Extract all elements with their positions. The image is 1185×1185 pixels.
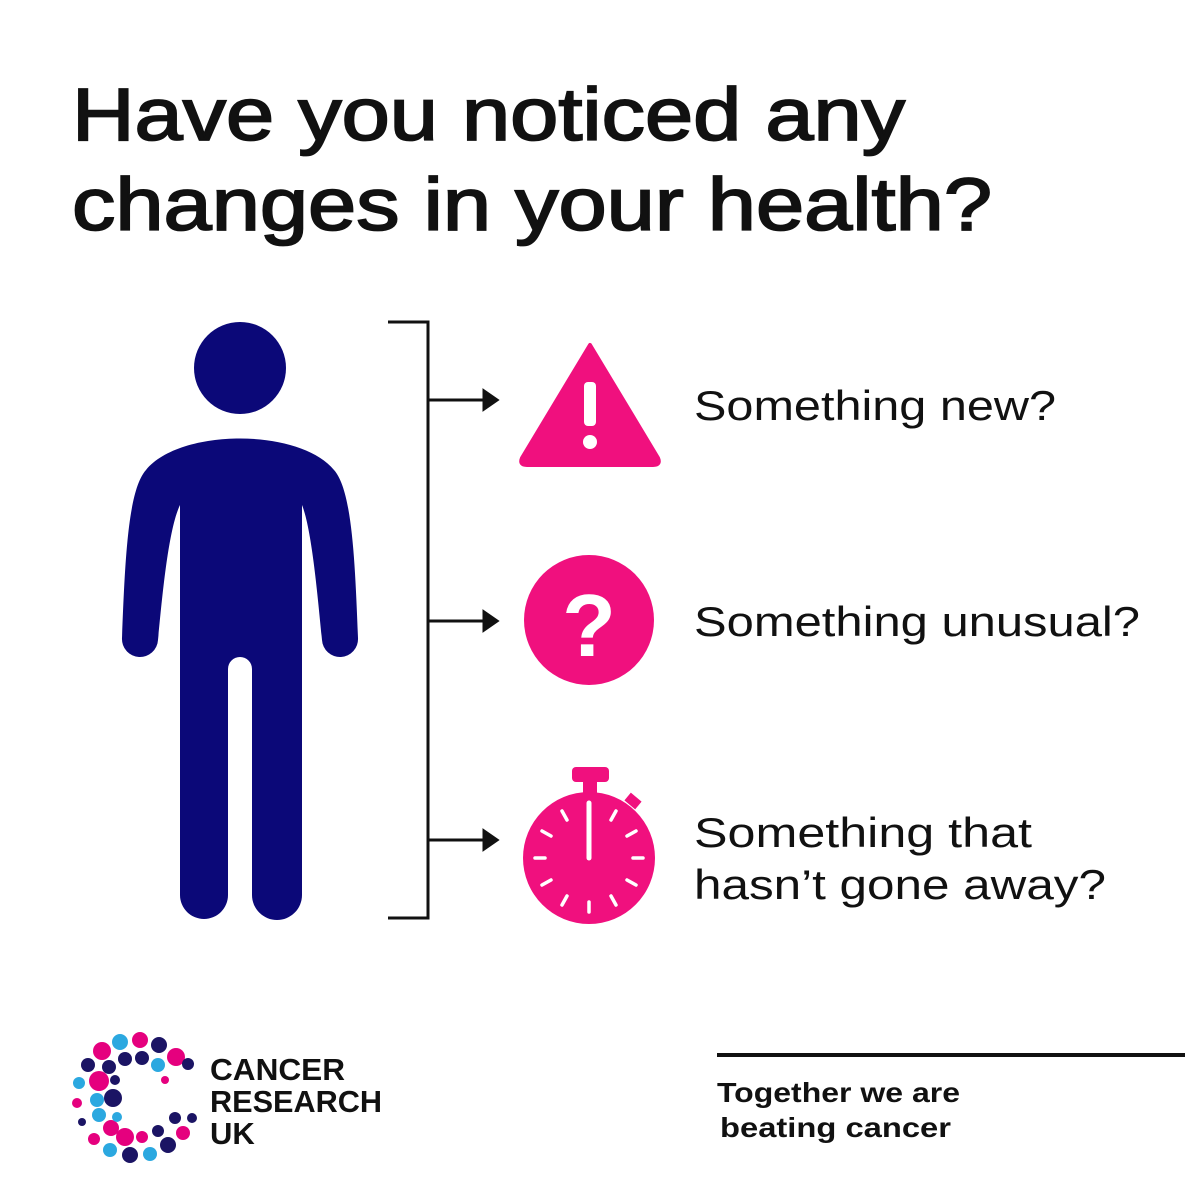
text: options: Something new? bbox=[694, 382, 1056, 429]
logo: wordmark: UK bbox=[210, 1116, 255, 1151]
icon: person figure bbox=[122, 322, 358, 920]
tagline: beating cancer bbox=[720, 1112, 951, 1143]
logo: wordmark bbox=[210, 1052, 382, 1151]
icon: question circle bbox=[524, 555, 654, 685]
logo: wordmark: CANCER bbox=[210, 1052, 345, 1087]
icon: stopwatch bbox=[523, 767, 655, 924]
tagline bbox=[717, 1053, 1185, 1143]
text: options: Something that bbox=[694, 809, 1032, 856]
text: options bbox=[694, 382, 1140, 908]
title: Have you noticed any bbox=[72, 73, 905, 156]
icon: warning triangle bbox=[521, 345, 659, 465]
tagline: Together we are bbox=[717, 1077, 960, 1108]
text: options: hasn’t gone away? bbox=[694, 861, 1106, 908]
title: changes in your health? bbox=[72, 163, 992, 246]
title bbox=[72, 73, 992, 246]
text: options: Something unusual? bbox=[694, 598, 1140, 645]
icon: question circle: ? bbox=[562, 576, 616, 675]
logo: dots bbox=[72, 1032, 197, 1163]
bracket with arrows bbox=[388, 322, 497, 918]
logo: wordmark: RESEARCH bbox=[210, 1084, 382, 1119]
